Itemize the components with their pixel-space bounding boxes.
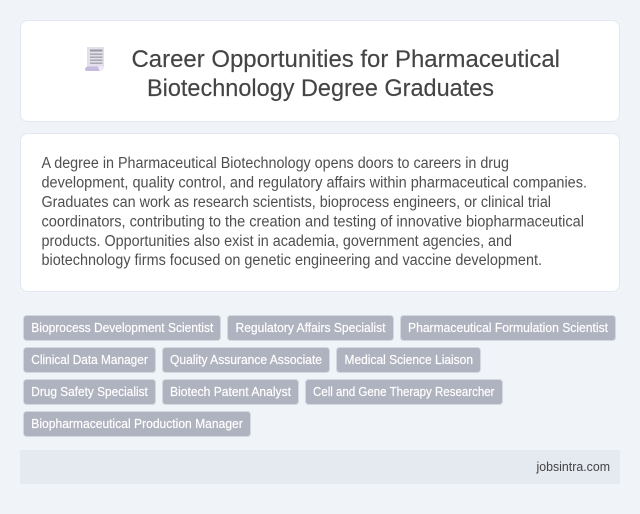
- tag: [24, 412, 250, 436]
- tag: [336, 348, 480, 372]
- icon: document scroll: [85, 47, 104, 71]
- tag: [306, 380, 502, 404]
- tag: Bioprocess Development Scientist: [31, 321, 214, 335]
- text block: description: A degree in Pharmaceutical Biotechnology opens doors to careers in drug: [42, 155, 509, 172]
- tag: [162, 380, 298, 404]
- footer: [20, 450, 620, 484]
- tag: Pharmaceutical Formulation Scientist: [408, 321, 609, 335]
- panel: description: [20, 134, 620, 292]
- tag: [162, 348, 330, 372]
- tag: Quality Assurance Associate: [170, 353, 322, 367]
- tag: [24, 316, 220, 340]
- tag: Medical Science Liaison: [344, 353, 473, 367]
- panel: header: [20, 20, 620, 122]
- text block: description: biotechnology firms focused on genetic engineering and vaccine development.: [42, 252, 542, 269]
- tag: Clinical Data Manager: [31, 353, 148, 367]
- text block: description: development, quality control, and regulatory affairs within pharmaceutical companies.: [42, 174, 587, 192]
- footer source text: jobsintra.com: [536, 460, 610, 474]
- text block: description: [42, 155, 587, 269]
- tag: [24, 348, 156, 372]
- text block: description: products. Opportunities also exist in academia, government agencies, and: [42, 233, 512, 250]
- tags: career roles: [24, 316, 616, 436]
- tag: Drug Safety Specialist: [31, 385, 148, 399]
- title: Biotechnology Degree Graduates: [147, 75, 494, 102]
- tag: Regulatory Affairs Specialist: [236, 321, 386, 335]
- title: Career Opportunities for Pharmaceutical: [132, 46, 560, 73]
- tag: [228, 316, 394, 340]
- tag: Biotech Patent Analyst: [170, 385, 291, 399]
- tag: Biopharmaceutical Production Manager: [31, 417, 243, 431]
- text block: description: coordinators, contributing to the creation and testing of innovative biopharmaceutical: [42, 214, 584, 230]
- tag: Cell and Gene Therapy Researcher: [313, 385, 494, 399]
- tag: [24, 380, 156, 404]
- tag: [400, 316, 616, 340]
- text block: description: Graduates can work as research scientists, bioprocess engineers, or clinical trial: [42, 194, 551, 211]
- title: [132, 46, 560, 102]
